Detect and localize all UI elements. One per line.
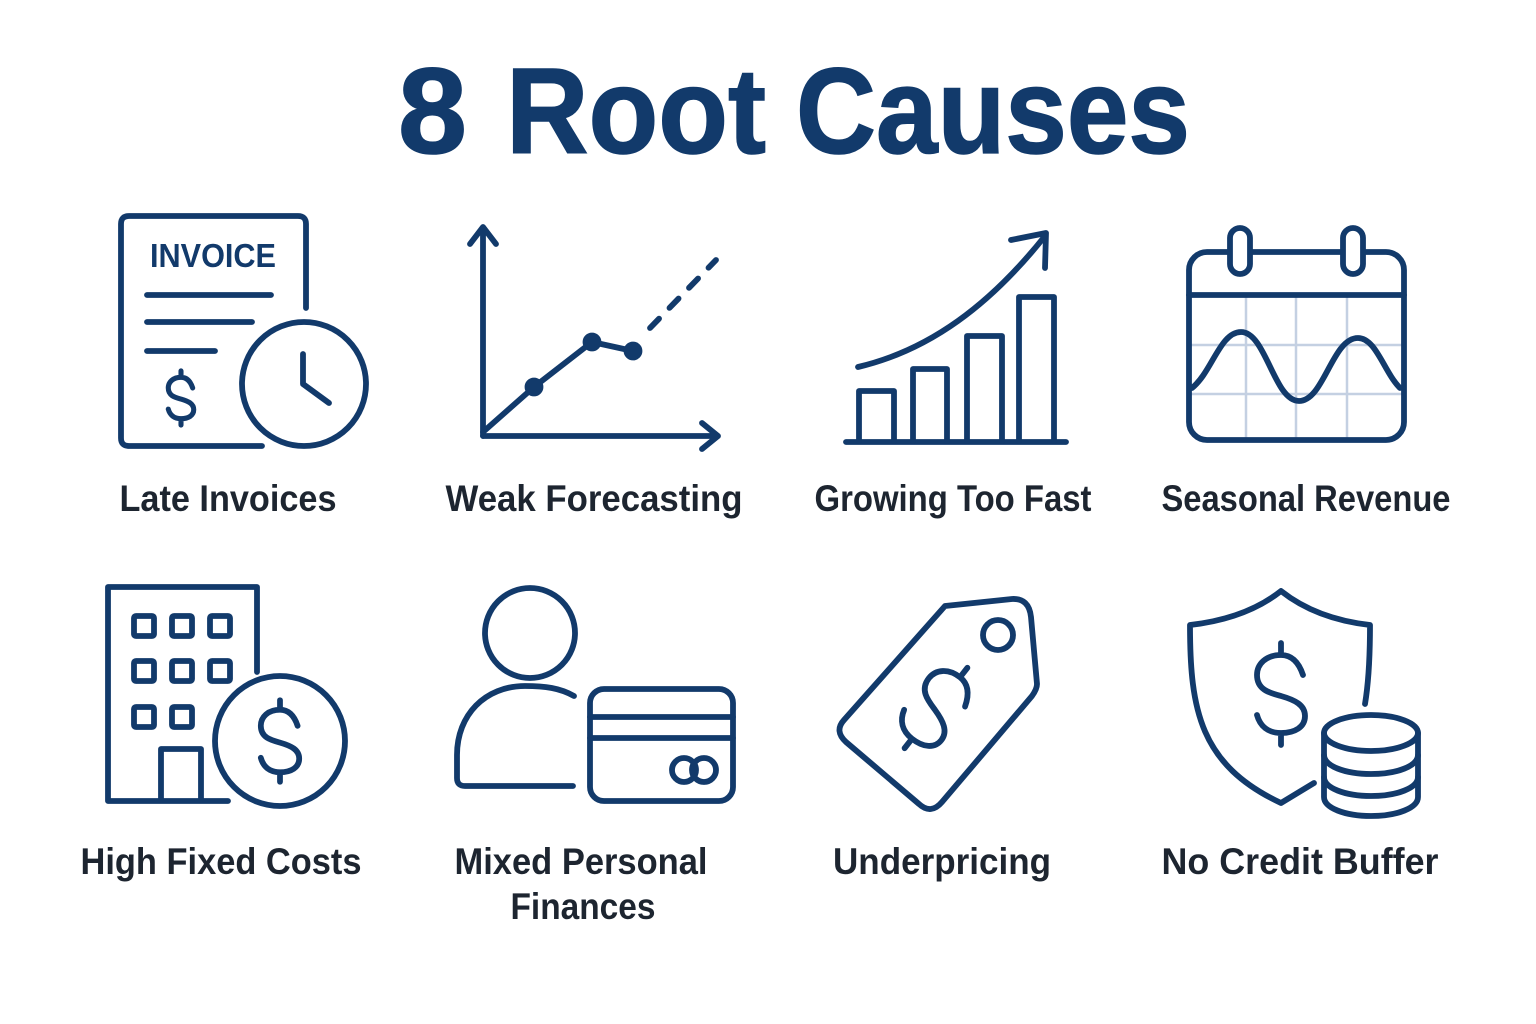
label: mixed personal finances bbox=[454, 841, 708, 927]
title: Causes bbox=[796, 43, 1190, 179]
icon: seasonal revenue bbox=[1189, 228, 1404, 440]
icon: late invoices bbox=[121, 216, 366, 446]
icon: weak forecasting bbox=[470, 227, 718, 449]
icon: mixed personal finances bbox=[457, 588, 733, 801]
title: 8 bbox=[398, 43, 467, 179]
label: underpricing: Underpricing bbox=[833, 841, 1051, 882]
label: high fixed costs: High Fixed Costs bbox=[80, 841, 362, 882]
title: Root bbox=[506, 43, 766, 179]
title bbox=[398, 43, 1190, 179]
icon: late invoices: INVOICE bbox=[150, 237, 276, 274]
icon: no credit buffer bbox=[1190, 591, 1418, 816]
icon: high fixed costs bbox=[108, 587, 345, 806]
label: weak forecasting: Weak Forecasting bbox=[446, 478, 742, 519]
label: mixed personal finances: Mixed Personal bbox=[454, 841, 708, 882]
label: no credit buffer: No Credit Buffer bbox=[1162, 841, 1438, 882]
label: growing too fast: Growing Too Fast bbox=[814, 478, 1092, 519]
icon: underpricing bbox=[839, 599, 1037, 809]
label: mixed personal finances: Finances bbox=[510, 886, 656, 927]
label: late invoices: Late Invoices bbox=[120, 478, 336, 519]
label: seasonal revenue: Seasonal Revenue bbox=[1162, 478, 1450, 519]
icon: growing too fast bbox=[846, 233, 1066, 442]
